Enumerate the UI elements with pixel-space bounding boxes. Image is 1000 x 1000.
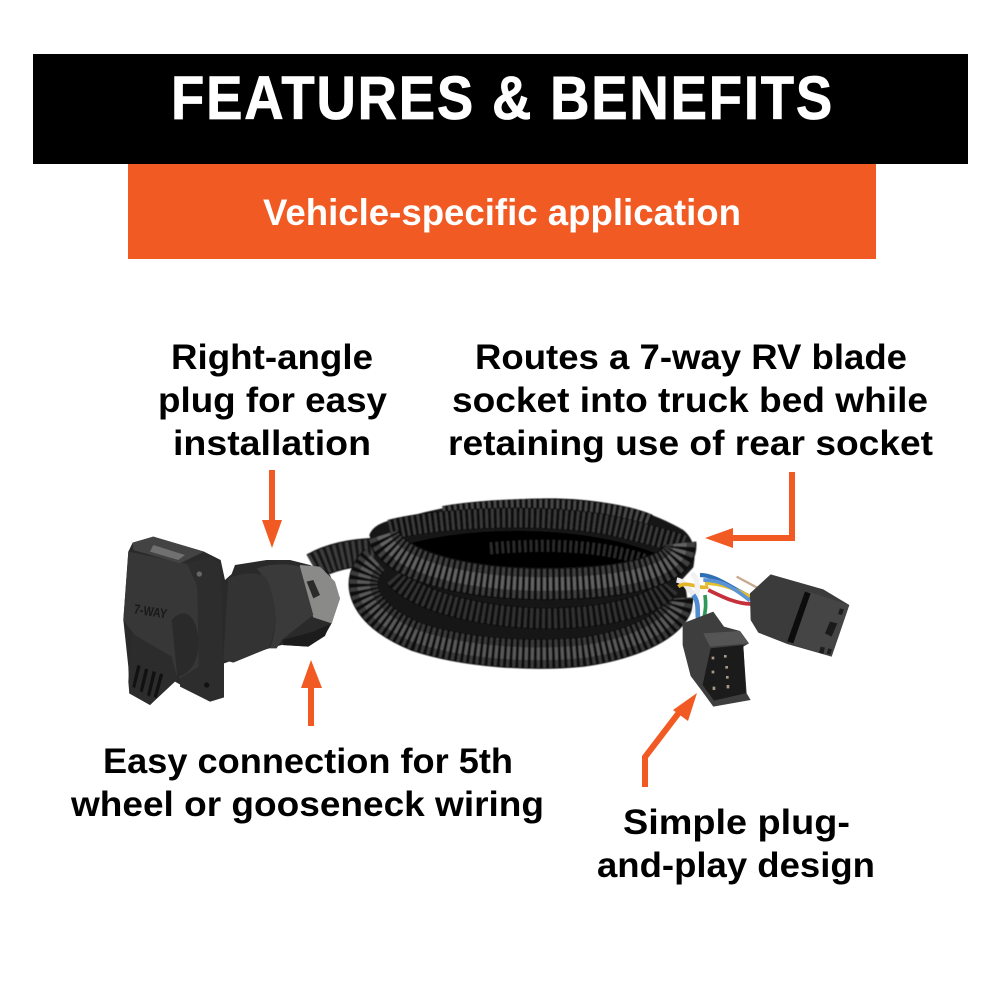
socket silhouette xyxy=(123,537,340,705)
label: plug-and-play xyxy=(597,803,875,885)
label: routes socket into truck bed: Routes a 7-way RV blade xyxy=(475,338,907,377)
label: routes socket into truck bed: socket into truck bed while xyxy=(452,381,928,420)
label: easy connection: wheel or gooseneck wiring xyxy=(70,785,544,824)
label: easy connection xyxy=(70,742,544,824)
label: routes socket into truck bed xyxy=(448,338,933,463)
label: easy connection: Easy connection for 5th xyxy=(103,742,513,781)
bottom flap xyxy=(128,633,177,705)
arrow: to gooseneck connection xyxy=(301,660,322,726)
label: plug-and-play: and-play design xyxy=(597,846,875,885)
subtitle banner xyxy=(128,164,876,259)
far back ring xyxy=(443,506,650,522)
right-angle 7-way socket xyxy=(123,537,340,705)
title banner: FEATURES & BENEFITS xyxy=(171,64,834,132)
label: right-angle plug: plug for easy xyxy=(158,381,388,420)
arrow: to right-angle plug xyxy=(262,470,282,548)
title banner xyxy=(33,54,968,164)
socket front face xyxy=(123,552,199,678)
adapter body xyxy=(257,564,313,648)
corrugated cable coil xyxy=(355,498,695,668)
label: plug-and-play: Simple plug- xyxy=(623,803,850,842)
adapter cap xyxy=(300,565,340,623)
label: right-angle plug: installation xyxy=(173,424,371,463)
cable from plug to coil xyxy=(313,552,380,567)
inner ring xyxy=(490,546,650,562)
near back ring xyxy=(390,518,683,545)
upper front ring of coil xyxy=(383,535,680,584)
face lettering: 7-WAY xyxy=(133,601,168,622)
lower ring of coil xyxy=(364,560,678,654)
label: right-angle plug: Right-angle xyxy=(171,338,373,377)
mounting flange xyxy=(180,557,224,702)
arrow: to vehicle plug xyxy=(645,693,697,787)
top latch xyxy=(133,537,204,563)
rear socket connector xyxy=(750,574,849,657)
dark coil interior xyxy=(410,531,667,572)
arrow: to coil from routes label xyxy=(705,472,792,548)
harness wires xyxy=(677,573,758,620)
coil silhouette xyxy=(355,498,695,668)
middle ring of coil xyxy=(395,577,670,618)
vehicle plug connector xyxy=(683,612,751,707)
label: right-angle plug xyxy=(158,338,388,463)
subtitle banner: Vehicle-specific application xyxy=(263,192,741,233)
label: routes socket into truck bed: retaining use of rear socket xyxy=(448,424,933,463)
